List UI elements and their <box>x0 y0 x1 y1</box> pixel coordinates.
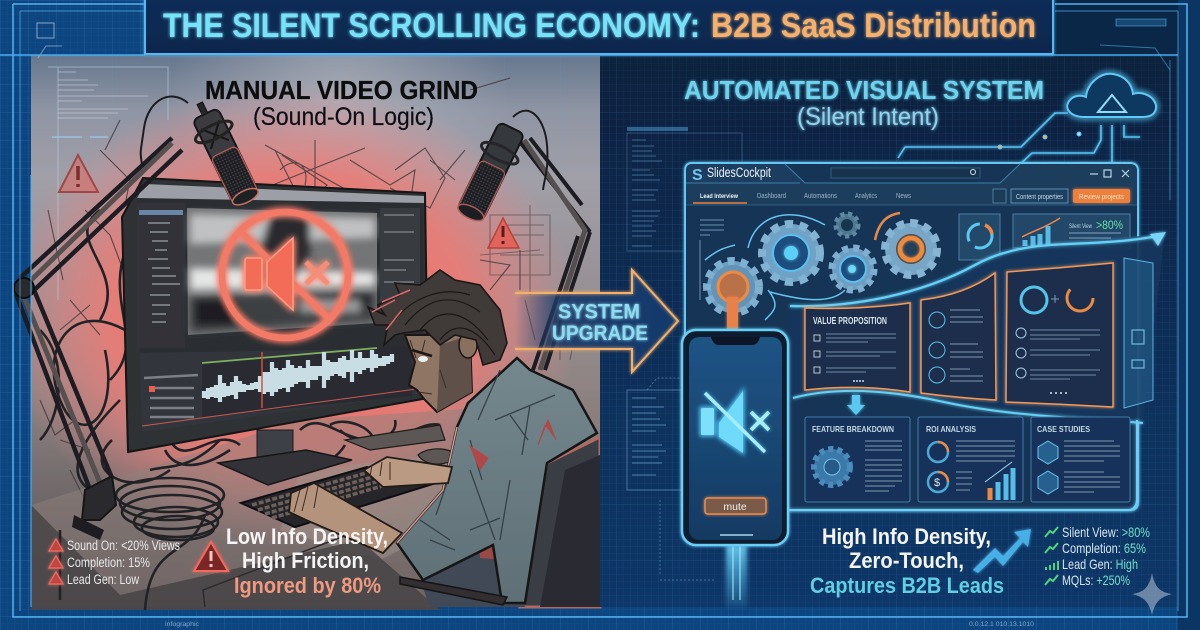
callout: left: High Friction, <box>242 548 369 573</box>
icon: muted speaker on monitor <box>222 212 348 338</box>
icon: sketched warning right <box>488 218 519 248</box>
window title bar <box>686 164 1137 205</box>
callout: right: Captures B2B Leads <box>810 573 1004 598</box>
orange connector to phone <box>727 297 738 331</box>
stats: right: Completion: 65% <box>1062 540 1146 556</box>
right heading: AUTOMATED VISUAL SYSTEM <box>684 75 1044 105</box>
dashboard window: Analytics <box>855 191 877 200</box>
phone: mute <box>723 501 747 513</box>
timeline <box>140 348 425 432</box>
phone <box>682 330 788 545</box>
waveform <box>204 350 392 402</box>
neck and face <box>405 335 472 412</box>
right inspector <box>380 208 420 312</box>
armrest <box>400 577 507 605</box>
card: case studies: CASE STUDIES <box>1037 424 1090 434</box>
left heading: (Sound-On Logic) <box>253 103 434 131</box>
mouse and desk clutter <box>345 425 458 464</box>
dashboard window: Content properties <box>1016 192 1063 201</box>
desk <box>31 400 600 607</box>
blueprint notes <box>627 129 742 580</box>
footer captions <box>165 621 1034 628</box>
hair <box>368 270 507 365</box>
card: value proposition <box>805 303 910 392</box>
card: feature breakdown: FEATURE BREAKDOWN <box>812 424 894 434</box>
phone screen <box>689 337 782 540</box>
card: roi analysis <box>918 417 1023 502</box>
arrow: growth <box>973 529 1031 573</box>
arrow: ribbon down to features <box>847 395 865 415</box>
stats: left: Lead Gen: Low <box>67 572 139 587</box>
footer captions: infographic <box>165 621 200 628</box>
toolbar buttons <box>993 189 1006 203</box>
callout: right: High Info Density, <box>822 524 991 549</box>
icon: sparkle watermark <box>1132 573 1172 615</box>
left microphone and boom <box>14 94 266 540</box>
stats: right: Lead Gen: High <box>1062 556 1138 572</box>
man at desk <box>289 270 600 607</box>
tabs: Lead Interview <box>700 193 739 200</box>
stats: right <box>1045 524 1150 588</box>
title: B2B SaaS Distribution <box>711 7 1036 45</box>
hands <box>289 483 402 553</box>
blueprint notes <box>37 23 168 300</box>
right microphone and boom <box>450 111 590 370</box>
dashboard window: Automations <box>804 191 837 200</box>
logo: S <box>692 167 703 184</box>
chart tile: Silent View <box>1069 223 1092 230</box>
microphone body <box>182 94 266 211</box>
keyboard <box>241 467 436 527</box>
gauge tile <box>959 214 1000 260</box>
left heading <box>205 75 478 131</box>
sketch scribbles <box>40 78 580 535</box>
card: case studies <box>1031 417 1130 502</box>
chart tile <box>1013 214 1130 248</box>
dashboard window <box>685 163 1166 510</box>
icon: sketched warning left <box>59 155 98 192</box>
shirt <box>397 358 597 603</box>
title <box>145 0 1053 54</box>
stats: left: Sound On: <20% Views <box>67 538 180 553</box>
dashboard window: SlidesCockpit <box>707 165 771 180</box>
title: THE SILENT SCROLLING ECONOMY: <box>163 7 700 45</box>
ribbon with slides <box>790 232 1166 423</box>
footer captions: 0.0.12.1 010.13.1010 <box>969 621 1034 628</box>
side rail panel <box>1124 258 1153 408</box>
stats: right: MQLs: +250% <box>1062 572 1130 588</box>
callout: left: Ignored by 80% <box>234 573 381 598</box>
stats: left: Completion: 15% <box>67 555 150 570</box>
icon: cloud <box>1067 74 1156 117</box>
blurred video preview <box>187 208 377 335</box>
right heading: (Silent Intent) <box>797 103 939 131</box>
dashboard window: Dashboard <box>757 191 786 200</box>
search box <box>831 168 980 178</box>
monitor stand <box>257 430 293 462</box>
cloud network <box>898 19 1170 200</box>
mute button <box>705 498 766 514</box>
monitor <box>122 178 428 485</box>
right heading <box>684 75 1044 131</box>
glow beam under phone <box>726 545 747 607</box>
trousers <box>420 540 525 607</box>
chart tile: >80% <box>1096 220 1123 232</box>
card: metrics <box>1006 263 1113 407</box>
dashboard window: News <box>896 191 911 200</box>
arrow: system upgrade: UPGRADE <box>552 322 648 345</box>
left heading: MANUAL VIDEO GRIND <box>205 75 478 105</box>
window lower frame line <box>788 420 1137 510</box>
panel: manual video grind <box>14 23 600 610</box>
card: roi analysis: $ <box>934 477 940 489</box>
panel divider <box>598 55 601 607</box>
card: value proposition: VALUE PROPOSITION <box>813 316 887 327</box>
card: feature breakdown <box>805 417 910 502</box>
stats: right: Silent View: >80% <box>1062 524 1150 540</box>
arrow: system upgrade <box>515 270 678 372</box>
icon: muted speaker on phone <box>701 391 769 453</box>
callout: left: Low Info Density, <box>226 524 388 549</box>
window controls <box>1090 170 1129 177</box>
monitor body <box>122 178 428 452</box>
card: value pipeline <box>921 273 996 400</box>
chair <box>520 437 600 607</box>
callout: right <box>810 524 1004 598</box>
panel: automated visual system <box>600 19 1178 607</box>
card: roi analysis: ROI ANALYSIS <box>926 424 976 434</box>
callout: left <box>194 524 388 598</box>
callout: right: Zero-Touch, <box>849 548 964 573</box>
editor sidebar <box>137 203 185 348</box>
arrow: system upgrade: SYSTEM <box>558 300 640 324</box>
side list <box>700 220 724 300</box>
tangled cables <box>40 210 440 610</box>
dashboard window: Review projects <box>1079 194 1124 201</box>
gears <box>705 213 937 320</box>
stats: left <box>49 538 180 587</box>
